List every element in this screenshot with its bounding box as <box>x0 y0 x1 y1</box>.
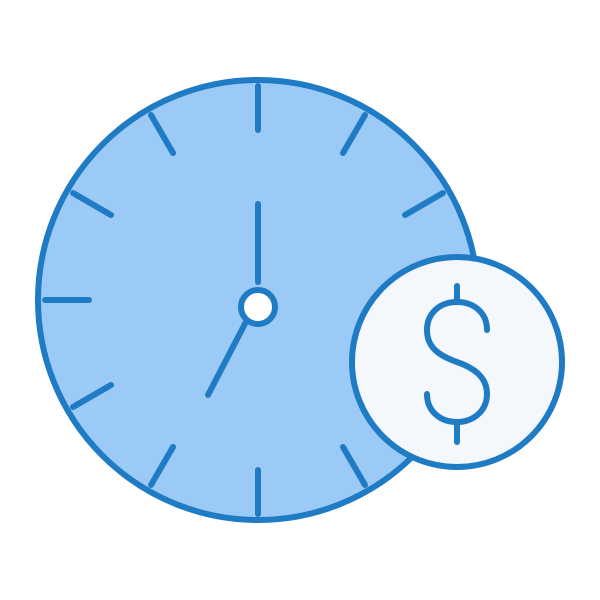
clock face <box>38 80 478 520</box>
dollar coin <box>352 257 562 467</box>
